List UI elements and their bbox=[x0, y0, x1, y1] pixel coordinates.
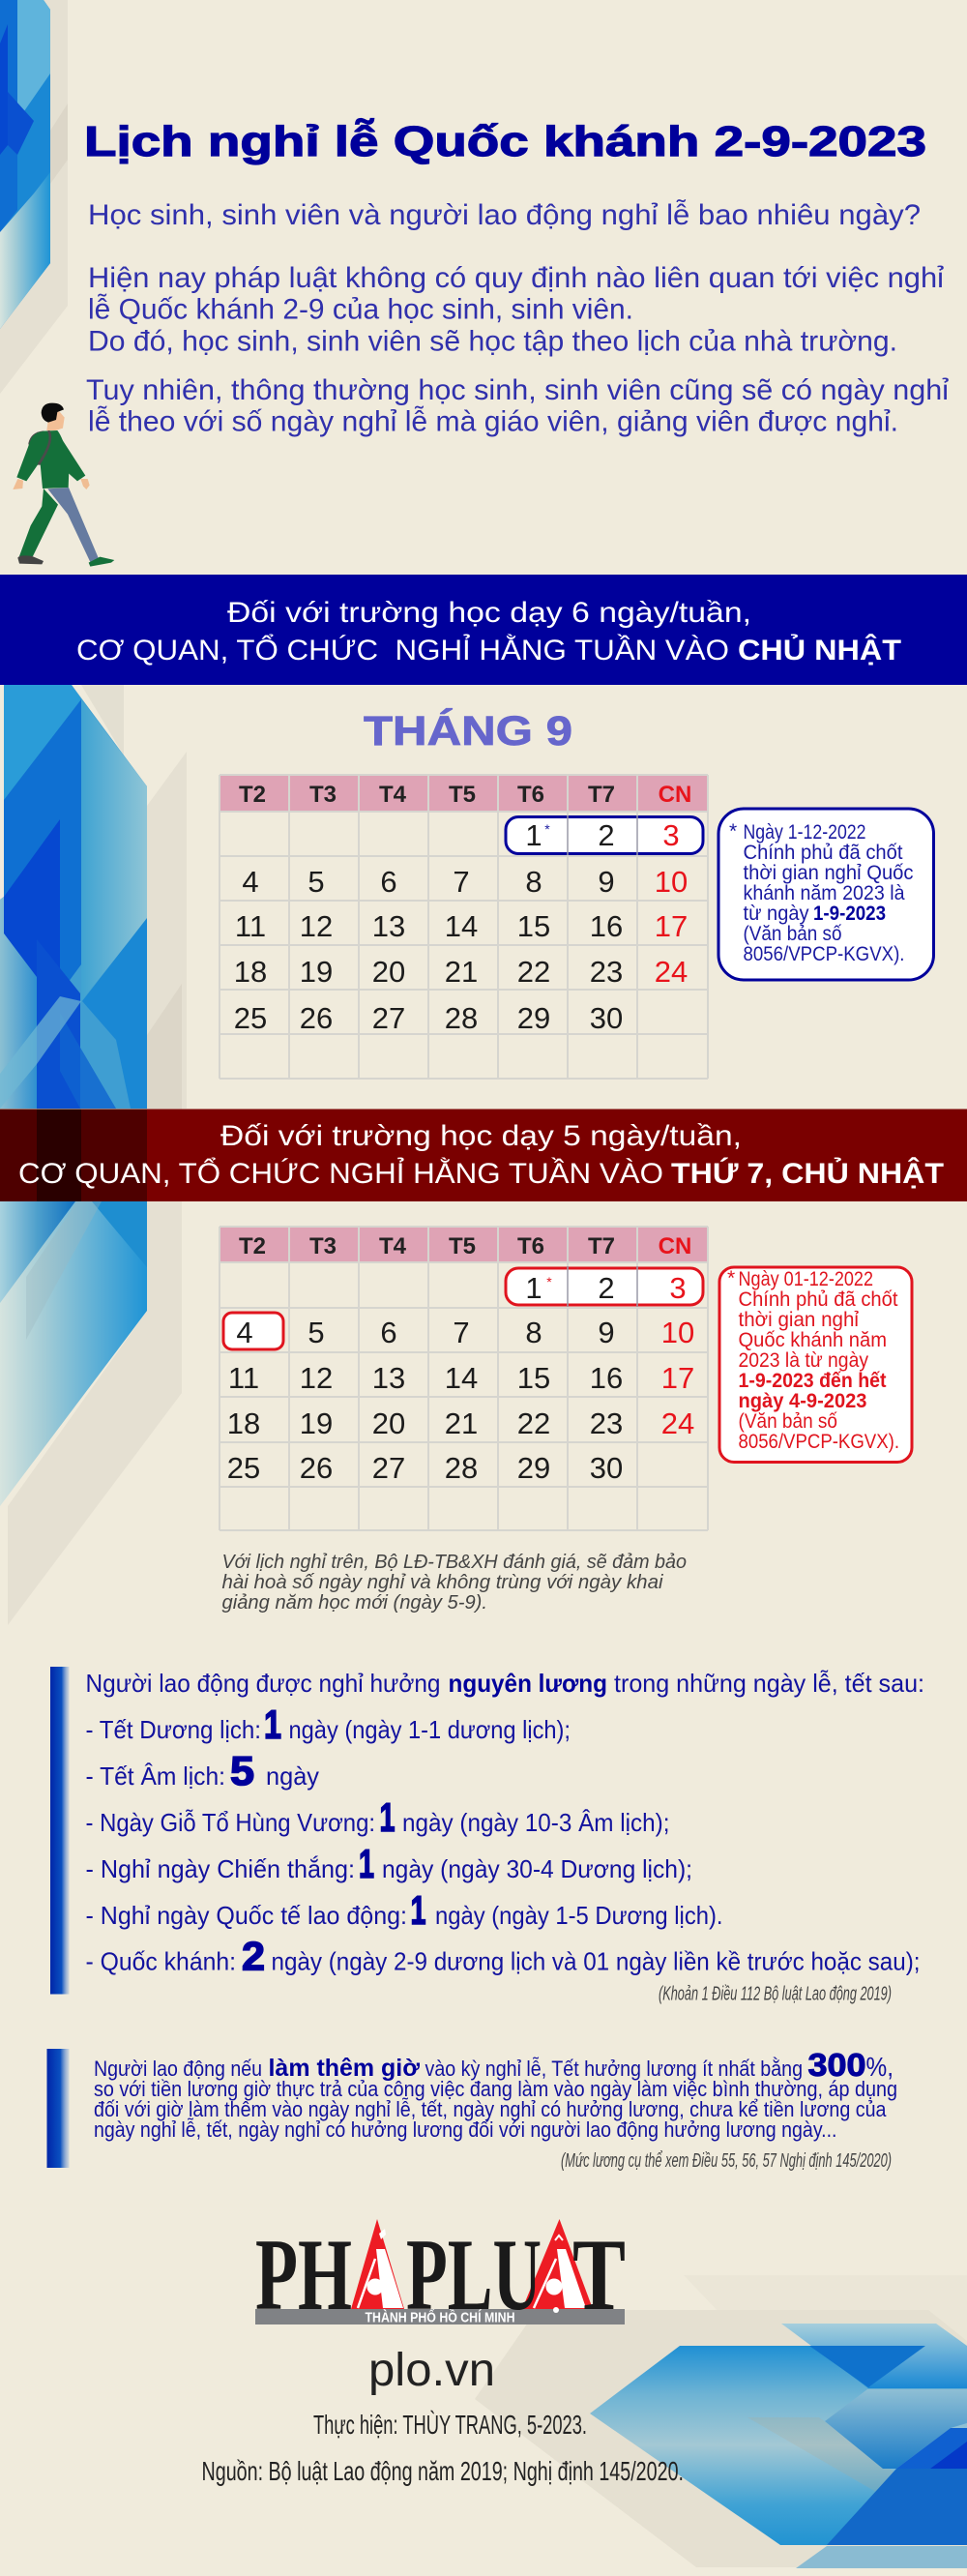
day numbers: 11 bbox=[228, 1361, 259, 1395]
intro text: Hiện nay pháp luật không có quy định nào liên quan tới việc nghỉ bbox=[88, 262, 944, 294]
day numbers: 2 bbox=[598, 818, 615, 852]
day numbers: 19 bbox=[300, 1406, 333, 1440]
callout: blue note: (Văn bản số bbox=[743, 923, 842, 945]
day numbers: 19 bbox=[300, 955, 333, 989]
website: plo.vn bbox=[368, 2345, 495, 2396]
day numbers bbox=[234, 818, 688, 1035]
day numbers: 12 bbox=[300, 909, 333, 943]
callout: red note: 2023 là từ ngày bbox=[739, 1349, 868, 1372]
banner: 5 days per week bbox=[0, 1109, 967, 1201]
day numbers: 23 bbox=[590, 1406, 623, 1440]
day numbers: 23 bbox=[590, 955, 623, 989]
banner: 5 days per week: CƠ QUAN, TỔ CHỨC NGHỈ HẰNG TUẦN VÀO bbox=[18, 1157, 663, 1190]
weekday header row: T6 bbox=[517, 1233, 544, 1259]
logo grey bar bbox=[255, 2309, 625, 2324]
banner: 6 days per week: Đối với trường học dạy 6 ngày/tuần, bbox=[227, 597, 751, 629]
day numbers: 6 bbox=[380, 865, 397, 899]
callout: red note: Ngày 01-12-2022 bbox=[739, 1268, 873, 1290]
weekday header row: T4 bbox=[379, 782, 407, 808]
weekday header row: T5 bbox=[449, 1233, 476, 1259]
callout: red note: thời gian nghỉ bbox=[739, 1309, 859, 1331]
weekday header row: T5 bbox=[449, 782, 476, 808]
day numbers: 7 bbox=[453, 1316, 470, 1349]
panel: paid holidays list: 1 bbox=[410, 1887, 425, 1933]
callout: red note: * bbox=[727, 1267, 735, 1289]
day numbers: 25 bbox=[227, 1451, 260, 1485]
panel: paid holidays list: ngày (ngày 1-5 Dương lịch). bbox=[435, 1901, 723, 1930]
panel: paid holidays list bbox=[50, 1667, 924, 1995]
day numbers: 15 bbox=[517, 909, 550, 943]
highlighted holiday range bbox=[506, 816, 703, 853]
panel: overtime pay: ngày nghỉ lễ, tết, ngày nghỉ có hưởng lương đối với người lao động hưởng lương ngày... bbox=[94, 2117, 837, 2142]
panel: overtime pay: 300 bbox=[808, 2047, 866, 2083]
banner: 5 days per week: THỨ 7, CHỦ NHẬT bbox=[671, 1157, 944, 1190]
panel: paid holidays list: trong những ngày lễ, tết sau: bbox=[614, 1669, 924, 1698]
weekday header row: T7 bbox=[588, 782, 615, 808]
weekday header row: T3 bbox=[309, 782, 337, 808]
calendar: 6-day schedule bbox=[220, 775, 708, 1079]
callout: red note: Chính phủ đã chốt bbox=[739, 1288, 898, 1311]
heading: month 9: THÁNG 9 bbox=[364, 708, 572, 755]
day numbers: 4 bbox=[242, 865, 259, 899]
panel: overtime pay: %, bbox=[866, 2052, 894, 2082]
panel: paid holidays list: - Nghỉ ngày Chiến thắng: bbox=[85, 1854, 355, 1883]
day numbers: 10 bbox=[655, 865, 688, 899]
banner: 6 days per week bbox=[0, 575, 967, 685]
callout: blue note: từ ngày bbox=[743, 903, 809, 925]
logo: Pháp Luật: PH bbox=[255, 2218, 352, 2331]
panel: overtime pay: vào kỳ nghỉ lễ, Tết hưởng lương ít nhất bằng bbox=[425, 2057, 803, 2081]
day numbers: 9 bbox=[598, 1316, 615, 1349]
weekday header row: T6 bbox=[517, 782, 544, 808]
day numbers: 14 bbox=[445, 909, 478, 943]
callout: blue note: 8056/VPCP-KGVX). bbox=[743, 943, 905, 965]
day numbers: 8 bbox=[525, 865, 542, 899]
panel: overtime pay: Người lao động nếu bbox=[94, 2057, 262, 2081]
weekday header row bbox=[239, 782, 691, 808]
intro text bbox=[86, 199, 949, 437]
callout: blue note: Chính phủ đã chốt bbox=[743, 842, 903, 864]
weekday header row: T3 bbox=[309, 1233, 337, 1259]
day numbers: 21 bbox=[445, 1406, 478, 1440]
day numbers: * bbox=[546, 1274, 552, 1289]
banner: 5 days per week: Đối với trường học dạy 5 ngày/tuần, bbox=[220, 1120, 742, 1152]
panel: paid holidays list: 1 bbox=[379, 1794, 395, 1840]
day numbers: 27 bbox=[372, 1451, 405, 1485]
day numbers: 1 bbox=[525, 818, 542, 852]
source line: Nguồn: Bộ luật Lao động năm 2019; Nghị định 145/2020. bbox=[201, 2456, 684, 2486]
panel: paid holidays list: ngày (ngày 10-3 Âm lịch); bbox=[402, 1808, 669, 1837]
day numbers: * bbox=[544, 821, 550, 837]
panel: paid holidays list: nguyên lương bbox=[449, 1669, 607, 1698]
day numbers: 16 bbox=[590, 1361, 623, 1395]
panel: paid holidays list: - Ngày Giỗ Tổ Hùng Vương: bbox=[85, 1808, 375, 1837]
day numbers: 28 bbox=[445, 1451, 478, 1485]
weekday header row: CN bbox=[659, 782, 691, 808]
panel: paid holidays list: - Tết Âm lịch: bbox=[85, 1762, 225, 1791]
day numbers: 10 bbox=[661, 1316, 694, 1349]
day numbers: 3 bbox=[662, 818, 680, 852]
panel: overtime pay: làm thêm giờ bbox=[269, 2055, 420, 2082]
panel: overtime pay: so với tiền lương giờ thực trả của công việc đang làm vào ngày làm việc bình thường, áp dụng bbox=[94, 2077, 897, 2101]
day numbers: 17 bbox=[661, 1361, 694, 1395]
panel: overtime pay: đối với giờ làm thêm vào ngày nghỉ lễ, tết, ngày nghỉ có hưởng lương, chưa kể tiền lương của bbox=[94, 2097, 887, 2121]
day numbers: 15 bbox=[517, 1361, 550, 1395]
day numbers: 14 bbox=[445, 1361, 478, 1395]
day numbers: 6 bbox=[380, 1316, 397, 1349]
note under calendars: giảng năm học mới (ngày 5-9). bbox=[222, 1592, 487, 1614]
callout: red note: 8056/VPCP-KGVX). bbox=[739, 1431, 899, 1453]
banner: 6 days per week: CHỦ NHẬT bbox=[738, 634, 901, 666]
day numbers: 26 bbox=[300, 1451, 333, 1485]
panel: paid holidays list: - Nghỉ ngày Quốc tế lao động: bbox=[85, 1901, 407, 1930]
day numbers: 3 bbox=[669, 1271, 687, 1305]
day numbers: 12 bbox=[300, 1361, 333, 1395]
day numbers: 20 bbox=[372, 1406, 405, 1440]
weekday header row: T2 bbox=[239, 782, 266, 808]
day numbers: 18 bbox=[234, 955, 267, 989]
logo: Pháp Luật bbox=[255, 2218, 626, 2331]
callout: red note: (Văn bản số bbox=[739, 1410, 837, 1433]
day numbers: 13 bbox=[372, 909, 405, 943]
intro text: Học sinh, sinh viên và người lao động nghỉ lễ bao nhiêu ngày? bbox=[88, 199, 921, 231]
note under calendars bbox=[222, 1552, 687, 1614]
credit line: Thực hiện: THÙY TRANG, 5-2023. bbox=[313, 2410, 587, 2440]
callout: blue note: Ngày 1-12-2022 bbox=[743, 821, 866, 844]
day numbers: 13 bbox=[372, 1361, 405, 1395]
logo: Pháp Luật: THÀNH PHỐ HỒ CHÍ MINH bbox=[366, 2308, 514, 2325]
panel: paid holidays list: 1 bbox=[359, 1841, 374, 1886]
callout: red note: 1-9-2023 đến hết bbox=[739, 1370, 886, 1392]
day numbers: 24 bbox=[655, 955, 688, 989]
day numbers: 16 bbox=[590, 909, 623, 943]
note under calendars: Với lịch nghỉ trên, Bộ LĐ-TB&XH đánh giá, sẽ đảm bảo bbox=[222, 1552, 687, 1573]
day numbers: 22 bbox=[517, 1406, 550, 1440]
icon: walking man with backpack bbox=[13, 403, 114, 567]
panel: paid holidays list: Người lao động được nghỉ hưởng bbox=[85, 1669, 441, 1698]
panel: paid holidays list: 5 bbox=[230, 1748, 254, 1793]
day numbers: 7 bbox=[453, 865, 470, 899]
day numbers: 1 bbox=[525, 1271, 542, 1305]
day numbers: 2 bbox=[598, 1271, 615, 1305]
day numbers: 8 bbox=[525, 1316, 542, 1349]
day numbers: 17 bbox=[655, 909, 688, 943]
day numbers: 20 bbox=[372, 955, 405, 989]
day numbers: 22 bbox=[517, 955, 550, 989]
calendar: 5-day schedule bbox=[220, 1227, 708, 1530]
weekday header row: T7 bbox=[588, 1233, 615, 1259]
panel: paid holidays list: ngày (ngày 30-4 Dương lịch); bbox=[382, 1854, 692, 1883]
note under calendars: hài hoà số ngày nghỉ và không trùng với ngày khai bbox=[222, 1572, 663, 1593]
day numbers: 26 bbox=[300, 1001, 333, 1035]
weekday header row: T2 bbox=[239, 1233, 266, 1259]
day numbers: 9 bbox=[598, 865, 615, 899]
day numbers: 24 bbox=[661, 1406, 694, 1440]
logo: Pháp Luật: T bbox=[572, 2218, 626, 2331]
weekday header row: T4 bbox=[379, 1233, 407, 1259]
intro text: lễ theo với số ngày nghỉ lễ mà giáo viên, giảng viên được nghỉ. bbox=[88, 406, 898, 437]
day numbers: 25 bbox=[234, 1001, 267, 1035]
day numbers: 30 bbox=[590, 1001, 623, 1035]
decoration: bottom right blue shapes bbox=[475, 2275, 967, 2568]
logo: Pháp Luật: PLU bbox=[406, 2218, 542, 2331]
highlighted day 4 bbox=[223, 1313, 283, 1349]
callout: red note: ngày 4-9-2023 bbox=[739, 1390, 866, 1412]
banner: 6 days per week: CƠ QUAN, TỔ CHỨC NGHỈ HẰNG TUẦN VÀO bbox=[76, 634, 729, 666]
decoration: middle left blue shapes bbox=[0, 685, 187, 1625]
day numbers: 4 bbox=[236, 1316, 253, 1349]
intro text: lễ Quốc khánh 2-9 của học sinh, sinh viên. bbox=[88, 294, 633, 325]
day numbers: 30 bbox=[590, 1451, 623, 1485]
callout: blue note bbox=[718, 809, 934, 980]
callout: blue note: thời gian nghỉ Quốc bbox=[743, 862, 913, 884]
callout: red note bbox=[719, 1267, 912, 1463]
day numbers: 29 bbox=[517, 1001, 550, 1035]
day numbers: 11 bbox=[235, 909, 266, 943]
highlighted holiday range bbox=[506, 1268, 703, 1305]
weekday header row: CN bbox=[659, 1233, 691, 1259]
day numbers: 28 bbox=[445, 1001, 478, 1035]
panel: paid holidays list: - Quốc khánh: bbox=[85, 1946, 236, 1975]
callout: blue note: khánh năm 2023 là bbox=[743, 882, 905, 904]
day numbers bbox=[227, 1271, 694, 1485]
panel: paid holidays list: 1 bbox=[264, 1702, 281, 1747]
panel: paid holidays list: ngày (ngày 2-9 dương lịch và 01 ngày liền kề trước hoặc sau); bbox=[271, 1946, 921, 1975]
panel: paid holidays list: ngày (ngày 1-1 dương lịch); bbox=[288, 1715, 571, 1744]
title: Lịch nghỉ lễ Quốc khánh 2-9-2023 bbox=[84, 117, 926, 165]
intro text: Tuy nhiên, thông thường học sinh, sinh viên cũng sẽ có ngày nghỉ bbox=[86, 374, 949, 406]
panel: paid holidays list: - Tết Dương lịch: bbox=[85, 1715, 261, 1744]
callout: blue note: 1-9-2023 bbox=[813, 903, 886, 925]
weekday header row bbox=[239, 1233, 691, 1259]
callout: red note: Quốc khánh năm bbox=[739, 1329, 887, 1351]
intro text: Do đó, học sinh, sinh viên sẽ học tập theo lịch của nhà trường. bbox=[88, 325, 897, 358]
panel: paid holidays list: ngày bbox=[266, 1762, 319, 1791]
panel: paid holidays list: 2 bbox=[242, 1933, 265, 1979]
decoration: top left blue shapes bbox=[0, 0, 68, 394]
day numbers: 5 bbox=[308, 865, 325, 899]
day numbers: 21 bbox=[445, 955, 478, 989]
day numbers: 18 bbox=[227, 1406, 260, 1440]
day numbers: 27 bbox=[372, 1001, 405, 1035]
callout: blue note: * bbox=[729, 820, 737, 843]
panel: overtime pay bbox=[46, 2047, 897, 2168]
day numbers: 5 bbox=[308, 1316, 325, 1349]
day numbers: 29 bbox=[517, 1451, 550, 1485]
